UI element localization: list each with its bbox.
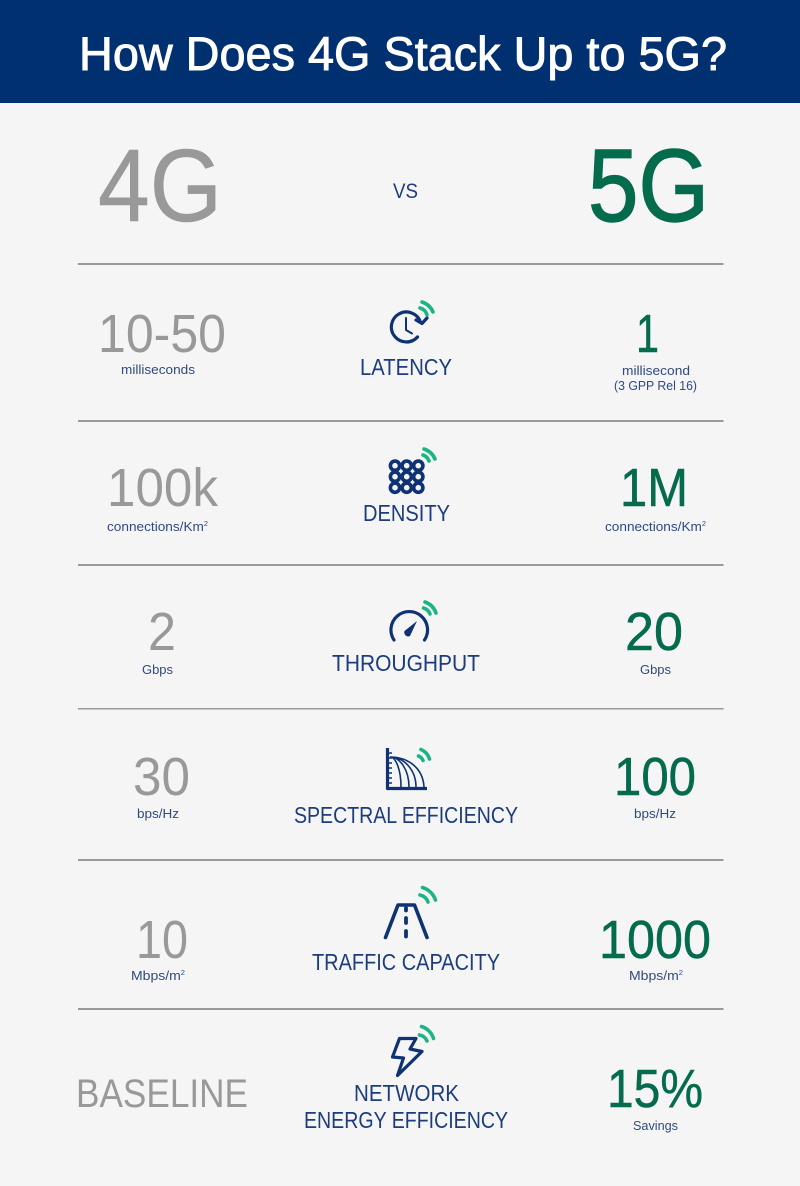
- 5G traffic value: 2: [679, 970, 683, 977]
- 5G throughput value: Gbps: [640, 662, 671, 677]
- 4G throughput value: Gbps: [142, 662, 173, 677]
- 5G throughput value: 20: [625, 602, 683, 662]
- 5G density value: 1M: [620, 458, 688, 518]
- 4G density value: connections/Km: [107, 519, 200, 534]
- icon: speedometer: [391, 602, 436, 640]
- 5G spectral value: bps/Hz: [634, 806, 676, 821]
- 5G latency value: [614, 304, 697, 393]
- 4G spectral value: 30: [133, 747, 190, 807]
- icon: density grid: [390, 449, 435, 492]
- title banner: [0, 0, 800, 103]
- 4G traffic value: Mbps/m: [131, 968, 177, 983]
- vs label: VS: [393, 180, 418, 203]
- 5G latency value: millisecond: [622, 363, 690, 378]
- 4G traffic value: [131, 910, 188, 983]
- row: throughput: [142, 602, 683, 677]
- 5G spectral value: 100: [614, 747, 696, 807]
- 4G latency value: milliseconds: [121, 362, 196, 377]
- title banner: How Does 4G Stack Up to 5G?: [79, 27, 727, 80]
- 5G latency value: 1: [636, 304, 659, 364]
- row: density: [107, 449, 706, 534]
- row: network energy efficiency: [76, 1026, 703, 1133]
- spectral efficiency label: SPECTRAL EFFICIENCY: [294, 802, 518, 828]
- network energy efficiency label: [304, 1080, 508, 1133]
- throughput label: THROUGHPUT: [332, 650, 480, 676]
- 4G heading: 4G: [98, 128, 222, 243]
- header row: 4G vs 5G: [98, 128, 709, 243]
- 4G throughput value: [142, 602, 176, 677]
- 5G heading: 5G: [588, 128, 709, 243]
- 5G savings value: 15%: [607, 1059, 703, 1119]
- 5G traffic value: Mbps/m: [629, 968, 675, 983]
- icon: latency clock: [391, 302, 433, 342]
- 5G traffic value: 1000: [599, 910, 711, 970]
- icon: road: [386, 888, 436, 938]
- traffic capacity label: TRAFFIC CAPACITY: [312, 949, 500, 975]
- row: latency: [98, 302, 697, 393]
- network energy efficiency label: NETWORK: [354, 1080, 460, 1106]
- 5G density value: 2: [702, 521, 706, 528]
- latency label: LATENCY: [360, 354, 452, 380]
- density label: DENSITY: [363, 500, 450, 526]
- row: traffic capacity: [131, 888, 711, 983]
- icon: lightning bolt: [392, 1026, 434, 1076]
- 5G density value: [605, 458, 706, 534]
- row: spectral efficiency: [133, 747, 696, 828]
- 4G traffic value: 10: [136, 910, 188, 970]
- network energy efficiency label: ENERGY EFFICIENCY: [304, 1107, 508, 1133]
- 4G traffic value: 2: [181, 970, 185, 977]
- icon: spectral chart: [388, 748, 430, 788]
- 4G spectral value: bps/Hz: [137, 806, 179, 821]
- 4G density value: 2: [204, 521, 208, 528]
- 4G latency value: 10-50: [98, 304, 226, 364]
- 4G density value: 100k: [107, 458, 219, 518]
- 5G density value: connections/Km: [605, 519, 698, 534]
- 5G savings value: Savings: [633, 1118, 678, 1133]
- 5G latency value: (3 GPP Rel 16): [614, 378, 697, 393]
- 4G baseline value: BASELINE: [76, 1072, 248, 1116]
- 4G throughput value: 2: [148, 602, 176, 662]
